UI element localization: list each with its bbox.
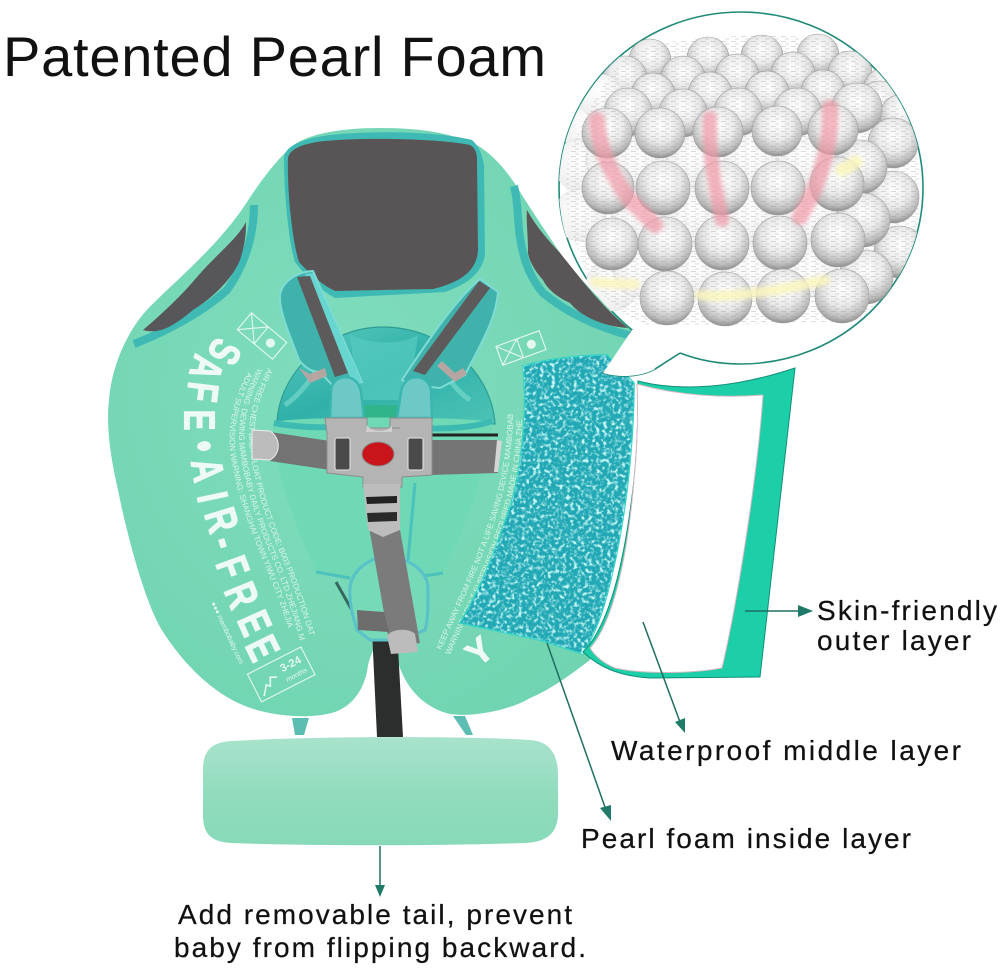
label: removable tail: Add removable tail, prevent <box>178 899 572 930</box>
safe air free print: A <box>181 455 233 486</box>
arrow: to outer layer <box>745 605 813 617</box>
small print text on left lobe: ADULT SUPERVISION WARNING: SHANGHAI TOWN YIWU CITY ZHEJIANG PROVINCE <box>230 372 293 628</box>
safe air free print: • <box>179 438 229 454</box>
safe air free print: A <box>179 350 233 386</box>
label: skin-friendly outer layer: outer layer <box>817 625 971 656</box>
safe air free print: R <box>214 576 268 615</box>
crotch strap loop <box>350 557 428 640</box>
safe air free print <box>174 331 289 669</box>
small print text on left lobe <box>230 368 315 640</box>
float body <box>108 128 633 716</box>
label: removable tail: baby from flipping backward. <box>174 932 586 963</box>
pearl foam layer <box>460 355 634 654</box>
age label box <box>247 647 315 702</box>
red release button <box>362 442 394 466</box>
small print text on right lobe: KEEP AWAY FROM FIRE NOT A LIFE SAVING DEVICE MAMBOBABY <box>436 414 513 650</box>
chest strap <box>252 430 502 475</box>
left shoulder strap <box>280 271 362 388</box>
cloth layers <box>583 368 795 678</box>
warning label box <box>237 313 287 359</box>
label: waterproof middle layer: Waterproof middle layer <box>611 735 961 766</box>
seat: shiny teal dome <box>277 327 495 425</box>
crotch strap <box>357 484 420 654</box>
safe air free print: F <box>205 550 258 585</box>
arrow: to tail <box>375 846 385 897</box>
label: removable tail <box>174 899 586 963</box>
label: skin-friendly outer layer: Skin-friendly <box>817 595 997 626</box>
small print text on right lobe <box>436 414 522 654</box>
pearl balls <box>554 30 926 330</box>
safe air free print: E <box>235 628 289 669</box>
right warning label box <box>496 331 546 365</box>
safe air free print: E <box>174 409 224 431</box>
safe air free print: I <box>187 488 237 507</box>
bubble tail cover <box>603 330 690 376</box>
buckle with adjuster loops <box>325 377 432 487</box>
safe air free print: E <box>227 604 281 643</box>
waterproof middle layer <box>590 384 763 672</box>
float connector clips <box>292 716 473 735</box>
left shoulder dark panel <box>134 205 254 344</box>
safe air free print: F <box>176 379 228 404</box>
safe air free print: R <box>194 502 248 538</box>
title: Patented Pearl Foam <box>3 25 546 88</box>
small print text on left lobe: WARNING: DEWING MAMBOBABY DAILY PRODUCTS CO. LTD ZHEJIANG MADE IN CHINA <box>239 370 305 640</box>
right shoulder strap <box>402 279 498 388</box>
right lobe letter: Y <box>458 629 501 674</box>
arrow: to middle layer <box>643 622 685 733</box>
headrest: dark panel <box>284 132 485 298</box>
product: baby swim float <box>108 128 631 737</box>
label: skin-friendly outer layer <box>817 595 997 656</box>
bubble outline <box>559 12 923 376</box>
bubble tail edge <box>655 353 680 369</box>
ball surface dimples <box>559 30 925 330</box>
right shoulder dark panel <box>514 186 632 336</box>
label: pearl foam inside layer: Pearl foam inside layer <box>581 823 911 854</box>
dark lower strap <box>372 630 403 737</box>
age label box: 3-24 <box>278 654 304 675</box>
safe air free print: S <box>197 331 251 372</box>
removable tail pillow <box>203 737 558 845</box>
pearl foam magnified bubble <box>554 12 926 376</box>
centre panel <box>273 418 493 628</box>
arrow: to foam layer <box>547 643 611 821</box>
safe air free print: - <box>200 530 250 555</box>
small print text on left lobe: AIR FREE CHEST BABY FLOAT PRODUCT CODE: B003 PRODUCTION DATE: 01.2021 MADE IN CHINA <box>249 368 315 634</box>
pink fibres <box>597 108 830 225</box>
yellow fibres <box>595 162 856 296</box>
outer layer teal <box>583 368 795 678</box>
brand line: ●●● mambobaby.com <box>209 601 244 665</box>
small print text on right lobe: WARNING ADULT SUPERVISION REQUIRED MADE IN CHINA ZHEJIANG <box>445 420 522 654</box>
age label box: months <box>285 667 309 684</box>
